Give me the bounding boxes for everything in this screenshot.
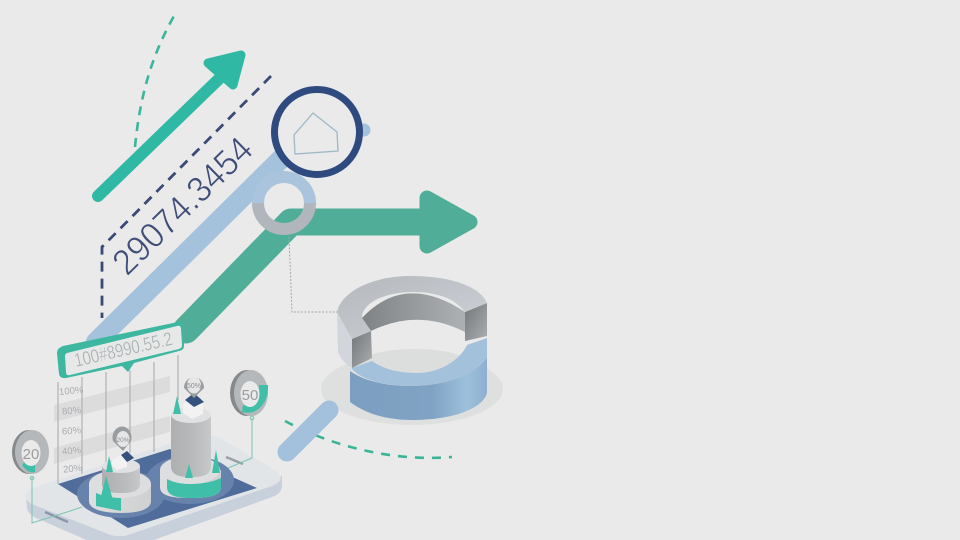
chart axis labels: 20%: [63, 463, 83, 476]
gauge 20: 20: [23, 446, 39, 463]
phone speaker and button: [45, 512, 68, 522]
right cylinder: [160, 393, 221, 498]
water rings: [77, 470, 165, 518]
small ring node: [258, 177, 310, 229]
dashed teal curve above arrow: [135, 16, 174, 147]
phone body: [26, 476, 282, 540]
gauge 20: [12, 430, 82, 523]
dashed teal curve below magnifier: [285, 421, 452, 458]
chart axis labels: 40%: [62, 445, 82, 458]
chart axis labels: [59, 385, 84, 476]
phone screen: [58, 449, 257, 528]
arrow: green bent arrow: [186, 198, 470, 330]
chart axis labels: 80%: [62, 405, 82, 418]
chart vertical lines: [58, 355, 178, 484]
connector dotted line: [289, 237, 352, 312]
chart axis labels: 60%: [62, 425, 82, 438]
phone with charts: [12, 322, 282, 540]
value label 29074.3454: 29074.3454: [104, 128, 261, 283]
knob behind circle: [358, 124, 370, 136]
magnifier: big ring chart: [321, 276, 503, 425]
icon: house in navy circle: [274, 90, 360, 174]
chart bands: [54, 376, 170, 422]
dashed navy bracket: [102, 76, 271, 318]
value box: [57, 322, 184, 378]
pin 50%: 50%: [187, 383, 201, 390]
pin 50%: [184, 376, 204, 398]
gauge 50: [228, 370, 268, 468]
arrow: teal up arrow: [98, 55, 241, 196]
pin 20%: 20%: [116, 437, 130, 444]
left cylinder: [89, 451, 151, 513]
pin 20%: [112, 426, 132, 451]
value box: 100#8990.55.2: [72, 329, 175, 372]
gauge 50: 50: [242, 387, 258, 404]
magnifier handle: [287, 410, 329, 452]
blue diagonal bar: [96, 156, 284, 342]
chart axis labels: 100%: [59, 385, 84, 398]
